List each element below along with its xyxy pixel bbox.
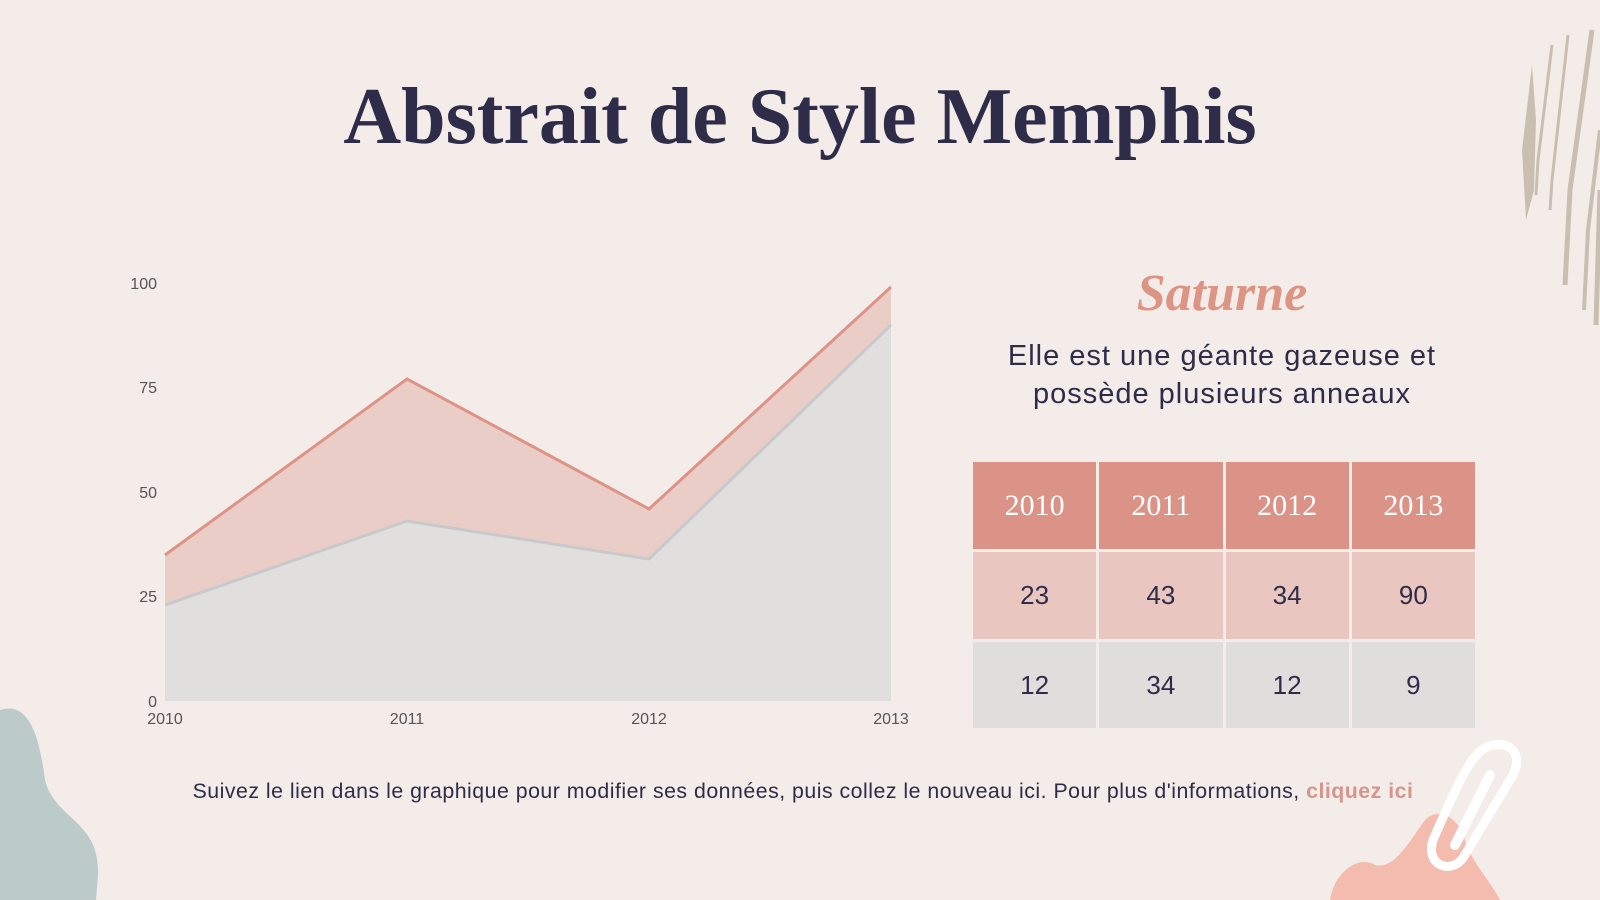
area chart: 0 <box>148 694 157 711</box>
table: 2010 <box>1005 489 1065 522</box>
title: Abstrait de Style Memphis <box>343 73 1257 161</box>
footer text: Suivez le lien dans le graphique pour modifier ses données, puis collez le nouveau ici. Pour plus d'informations, cliquez ici <box>193 779 1413 803</box>
table: 34 <box>1146 670 1175 700</box>
area chart: 2012 <box>631 711 667 728</box>
table: 43 <box>1146 580 1175 610</box>
table: 90 <box>1399 580 1428 610</box>
area chart: 75 <box>139 380 157 397</box>
table: 2011 <box>1131 489 1190 522</box>
table: 12 <box>1020 670 1049 700</box>
table: 2012 <box>1257 489 1317 522</box>
area chart: 25 <box>139 589 157 606</box>
decoration: grey blob bottom left <box>0 708 98 900</box>
area chart: 2010 <box>147 711 183 728</box>
heading: Saturne: Saturne <box>1137 265 1307 322</box>
table: 23 <box>1020 580 1049 610</box>
table: 34 <box>1273 580 1302 610</box>
area chart <box>130 276 909 728</box>
table: 12 <box>1273 670 1302 700</box>
table: 2013 <box>1383 489 1443 522</box>
decoration: pink blob bottom right <box>1330 814 1500 900</box>
table <box>973 462 1475 728</box>
area chart: 50 <box>139 485 157 502</box>
area chart: 2013 <box>873 711 909 728</box>
decoration: stripes top right <box>1522 30 1600 326</box>
table: 9 <box>1406 670 1421 700</box>
area chart: 100 <box>130 276 157 293</box>
text: description: Elle est une géante gazeuse et possède plusieurs anneaux <box>1008 340 1436 410</box>
area chart: 2011 <box>390 711 424 728</box>
icon: paperclip <box>1427 740 1521 871</box>
